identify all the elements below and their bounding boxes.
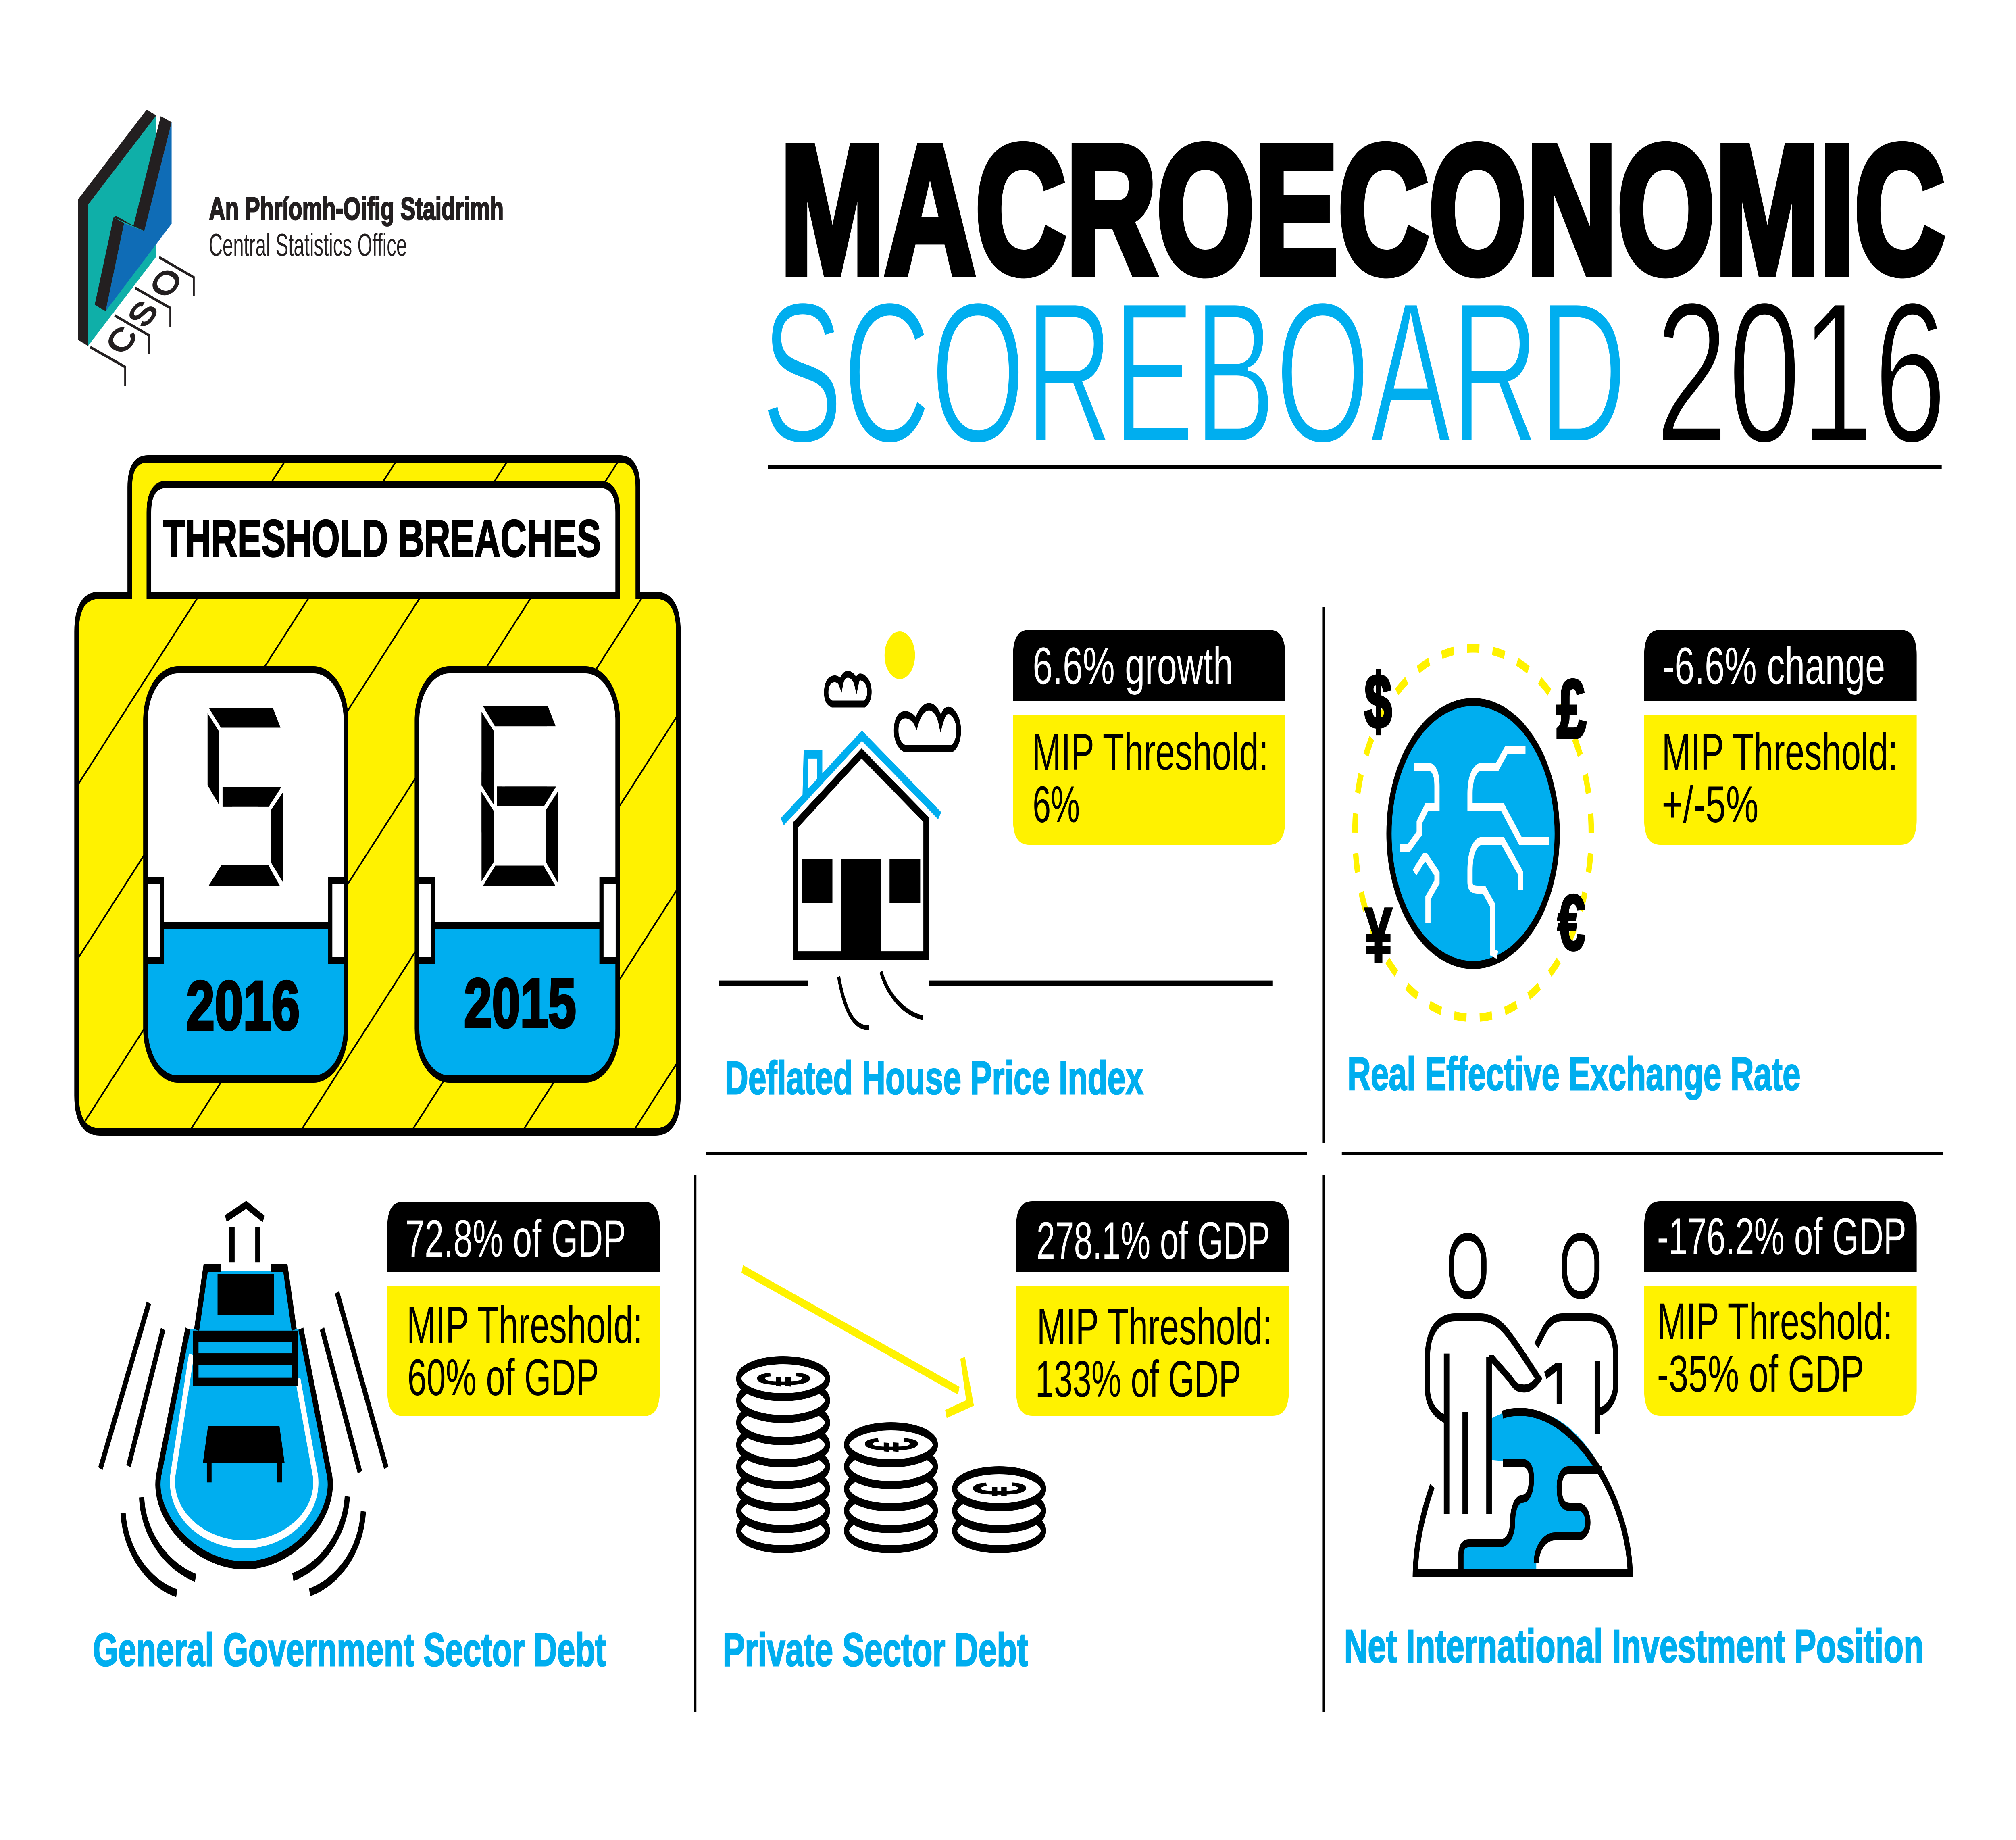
card: 2016 value 5	[146, 660, 346, 1079]
threshold box: 6%: MIP Threshold:	[1032, 723, 1268, 781]
heading: General Government Sector Debt: General Government Sector Debt	[93, 1623, 606, 1676]
title line 1: MACROECONOMIC	[780, 107, 1945, 311]
card: 2015 value 6: 2015	[464, 964, 576, 1042]
value box: 72.8% of GDP: 72.8% of GDP	[405, 1209, 626, 1268]
heading: Net International Investment Position: Net International Investment Position	[1344, 1620, 1924, 1672]
value box: 6.6% growth	[1013, 630, 1285, 701]
icon: falling coin stacks with arrow: €	[850, 1438, 933, 1452]
icon: house with sun and clouds	[719, 631, 1273, 1028]
threshold box: +/-5%	[1644, 715, 1917, 845]
heading: Private Sector Debt: Private Sector Debt	[723, 1623, 1028, 1676]
logo mark: CSO bolt: C	[98, 321, 144, 359]
icon: falling coin stacks with arrow: €	[742, 1372, 825, 1387]
card: 2016 value 5: 2016	[186, 967, 300, 1044]
threshold box: 60% of GDP: 60% of GDP	[407, 1348, 599, 1406]
icon: globe with currencies: €	[1558, 879, 1585, 967]
title line 2: scoreboard: SCOREBOARD	[762, 260, 1627, 485]
value box: -6.6% change	[1644, 630, 1917, 701]
logo mark: CSO bolt: S	[120, 296, 165, 332]
panel: threshold breaches scoreboard	[75, 456, 681, 1135]
icon: parliament building	[100, 1205, 386, 1593]
threshold box: 60% of GDP: MIP Threshold:	[407, 1296, 643, 1354]
logo: Central Statistics Office	[78, 110, 504, 386]
card: 2015 value 6: 6	[474, 660, 563, 939]
threshold box: 60% of GDP	[387, 1286, 660, 1416]
icon: globe with currencies	[1355, 648, 1591, 1018]
card: 2015 value 6	[417, 660, 618, 1079]
logo text: English name: Central Statistics Office	[209, 227, 407, 263]
panel: private sector debt	[723, 1201, 1289, 1676]
label box: threshold breaches	[149, 484, 618, 595]
threshold box: 6%	[1013, 715, 1285, 845]
threshold box: 133% of GDP	[1016, 1286, 1289, 1416]
threshold box: -35% of GDP: -35% of GDP	[1657, 1345, 1864, 1402]
threshold box: 133% of GDP: 133% of GDP	[1035, 1350, 1241, 1408]
value box: 72.8% of GDP	[387, 1202, 660, 1272]
title: Macroeconomic Scoreboard 2016	[762, 107, 1947, 485]
threshold box: -35% of GDP	[1644, 1286, 1917, 1416]
card: 2016 value 5: 5	[201, 660, 289, 939]
threshold box: 133% of GDP: MIP Threshold:	[1037, 1298, 1272, 1355]
threshold box: 6%: 6%	[1033, 775, 1080, 833]
logo text: Irish name: An Phríomh-Oifig Staidrimh	[209, 191, 504, 226]
threshold box: -35% of GDP: MIP Threshold:	[1657, 1292, 1893, 1350]
panel: deflated house price index	[719, 630, 1285, 1104]
value box: 278.1% of GDP: 278.1% of GDP	[1037, 1211, 1270, 1270]
heading: Real Effective Exchange Rate: Real Effective Exchange Rate	[1347, 1048, 1801, 1100]
threshold box: +/-5%: MIP Threshold:	[1662, 723, 1898, 781]
panel: general government sector debt	[93, 1202, 660, 1676]
panel: real effective exchange rate	[1347, 630, 1917, 1100]
icon: falling coin stacks with arrow: €	[958, 1482, 1041, 1496]
value box: -176.2% of GDP: -176.2% of GDP	[1657, 1207, 1906, 1266]
icon: falling coin stacks with arrow	[739, 1265, 1043, 1549]
logo mark: CSO bolt: O	[142, 263, 190, 303]
threshold box: +/-5%: +/-5%	[1662, 775, 1758, 833]
icon: globe with currencies: $	[1364, 658, 1392, 744]
icon: globe with currencies: ¥	[1365, 892, 1392, 977]
label box: threshold breaches: THRESHOLD BREACHES	[163, 509, 601, 568]
value box: -6.6% change: -6.6% change	[1662, 637, 1885, 696]
title line 2: year: 2016	[1655, 260, 1947, 485]
logo mark: CSO bolt	[78, 110, 194, 386]
panel: net international investment position	[1344, 1201, 1924, 1672]
heading: Deflated House Price Index: Deflated House Price Index	[725, 1052, 1143, 1104]
icon: globe with currencies: £	[1557, 663, 1586, 755]
icon: two people shaking hands over a globe	[1415, 1237, 1630, 1573]
value box: 6.6% growth: 6.6% growth	[1033, 637, 1233, 696]
